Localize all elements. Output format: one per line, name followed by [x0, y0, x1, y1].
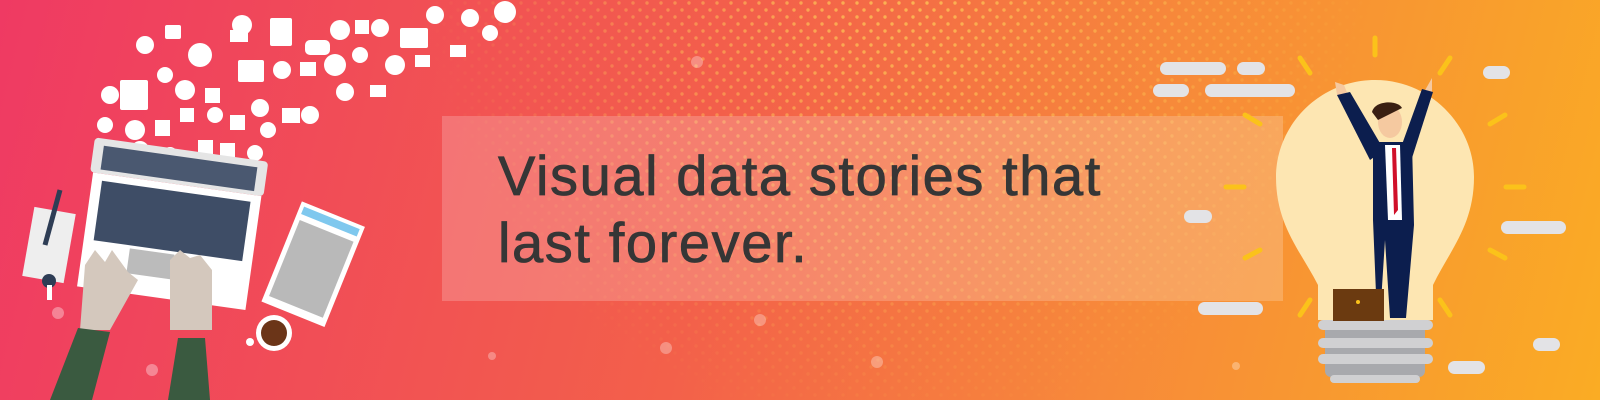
hands [80, 250, 212, 330]
coffee cup [246, 315, 292, 351]
rays [1226, 38, 1524, 315]
headline: last forever. [498, 211, 808, 274]
headline: Visual data stories that [498, 144, 1102, 207]
newspaper [261, 201, 365, 327]
bulb base [1318, 320, 1433, 383]
illustration: desk with laptop [22, 1, 516, 400]
laptop [74, 137, 268, 310]
sleeves [50, 328, 210, 400]
text panel [442, 116, 1283, 301]
headline [498, 144, 1102, 274]
clouds [1153, 62, 1566, 374]
envelope and pen [22, 190, 76, 300]
illustration: man in light bulb [1153, 36, 1566, 383]
bulb glass [1276, 80, 1474, 320]
businessman [1333, 78, 1433, 321]
icon cloud [97, 1, 516, 175]
